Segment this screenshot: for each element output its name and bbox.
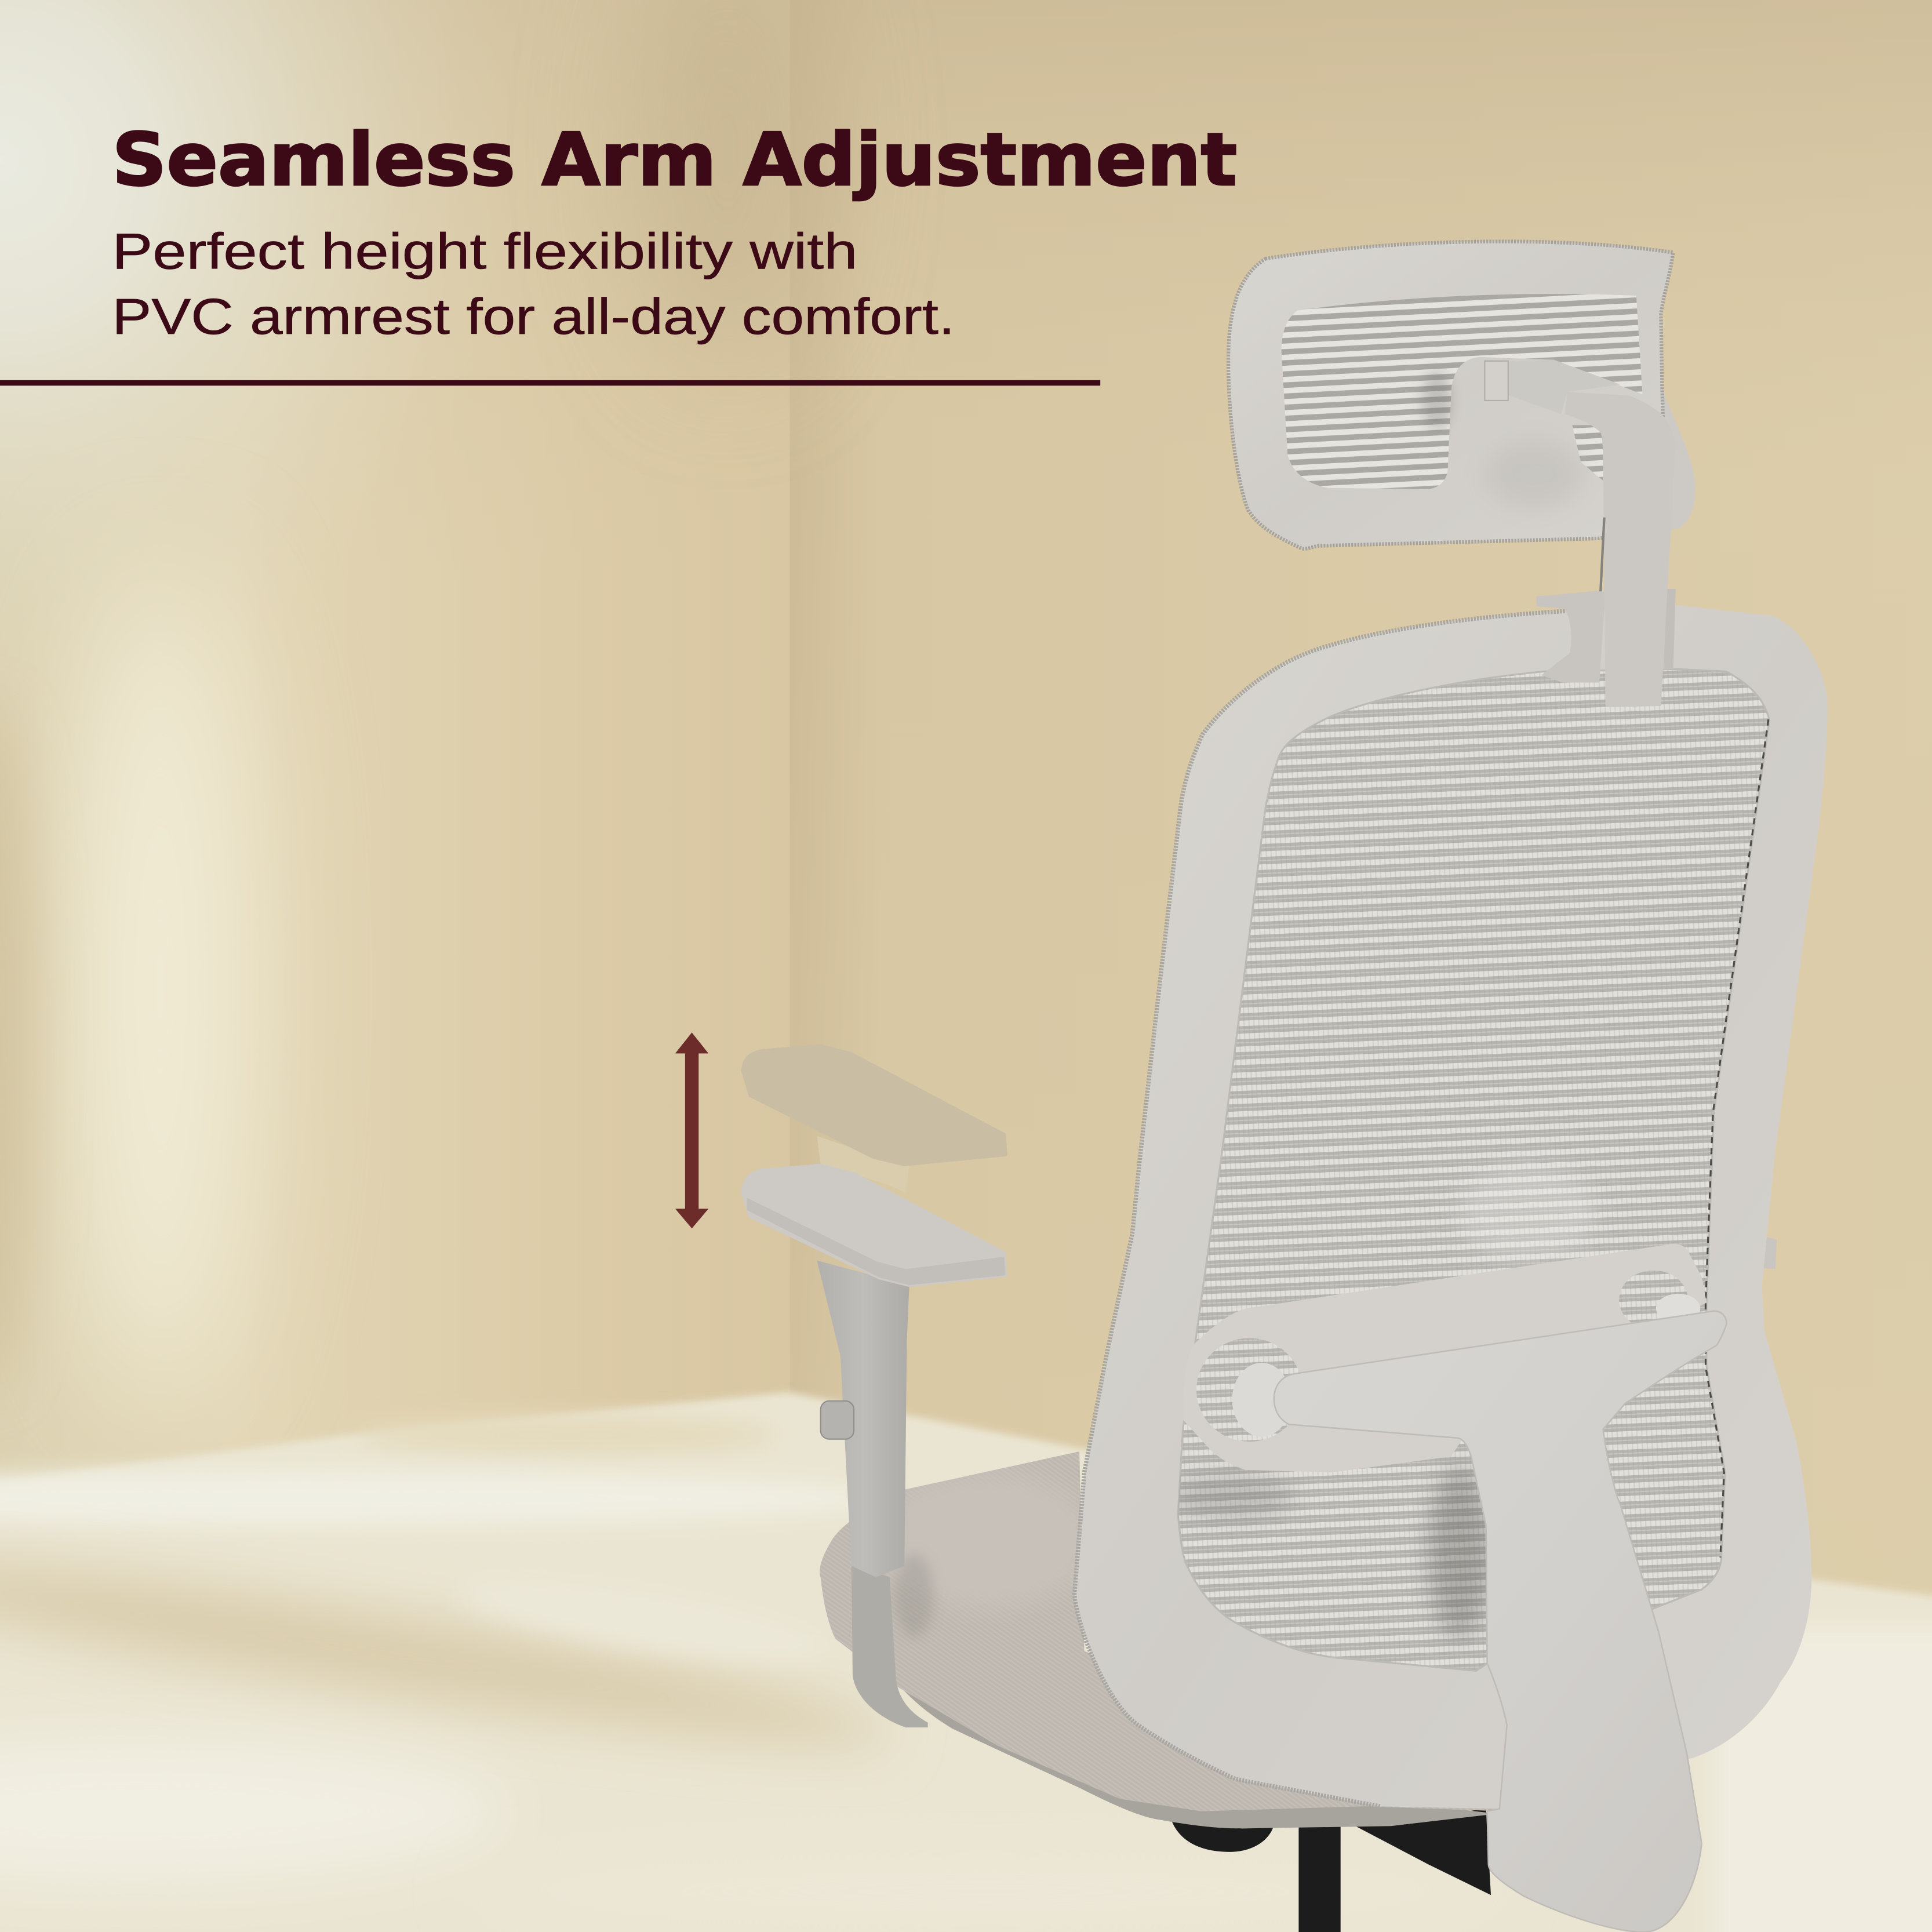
lumbar mesh hole left [1196, 1338, 1302, 1442]
mesh shading [1170, 719, 1769, 1639]
chair base [1171, 1809, 1491, 1932]
lumbar mesh hole right [1619, 1271, 1688, 1330]
armrest pad side [747, 1198, 1006, 1285]
ghost armrest stem [817, 1136, 909, 1193]
left armrest [743, 1046, 1006, 1727]
tilt mechanism [1355, 1809, 1491, 1895]
bar slit [1599, 518, 1606, 591]
back frame [1075, 605, 1828, 1809]
armrest post [817, 1261, 909, 1577]
headrest rear shell [1639, 388, 1695, 532]
knob left [1232, 1363, 1291, 1436]
lumbar support [1183, 1244, 1707, 1472]
vertical bar [1565, 392, 1676, 707]
headrest mesh [1282, 294, 1642, 489]
headrest [1228, 242, 1695, 549]
right clip [1664, 589, 1676, 669]
armrest pad [743, 1166, 1006, 1285]
gas column [1298, 1818, 1341, 1932]
cap [1485, 361, 1508, 401]
Y support arm [1274, 1311, 1726, 1932]
header rule [0, 380, 1100, 385]
headrest mesh shadow [1422, 371, 1451, 430]
double arrow [675, 1032, 708, 1228]
right armrest peek [1749, 1235, 1777, 1269]
seat [820, 1451, 1503, 1828]
back mesh [1178, 669, 1769, 1671]
lumbar plate [1183, 1244, 1707, 1472]
title: Seamless Arm Adjustment [112, 118, 1237, 202]
subtitle line 1: Perfect height flexibility with [112, 223, 857, 279]
adjustment button [821, 1401, 854, 1439]
horizontal arm [1487, 360, 1620, 414]
headrest mesh right window [1572, 425, 1603, 481]
ghost armrest pad [743, 1046, 1006, 1165]
seat rim [897, 1683, 1497, 1828]
chair [743, 242, 1828, 1932]
back frame body [1075, 605, 1828, 1809]
rear knob [1171, 1821, 1274, 1852]
seat cushion [820, 1451, 1503, 1811]
headrest support [1485, 360, 1676, 707]
clamp [1537, 590, 1606, 683]
headrest neck shadow [1485, 440, 1583, 509]
armrest post lower [852, 1565, 928, 1727]
floor [0, 1392, 1932, 1932]
back frame mesh edge [1075, 611, 1565, 1806]
headrest frame [1228, 242, 1673, 549]
subtitle [112, 223, 955, 345]
knob right [1656, 1294, 1700, 1323]
seat shading [894, 1480, 1080, 1636]
subtitle line 2: PVC armrest for all-day comfort. [112, 289, 955, 345]
